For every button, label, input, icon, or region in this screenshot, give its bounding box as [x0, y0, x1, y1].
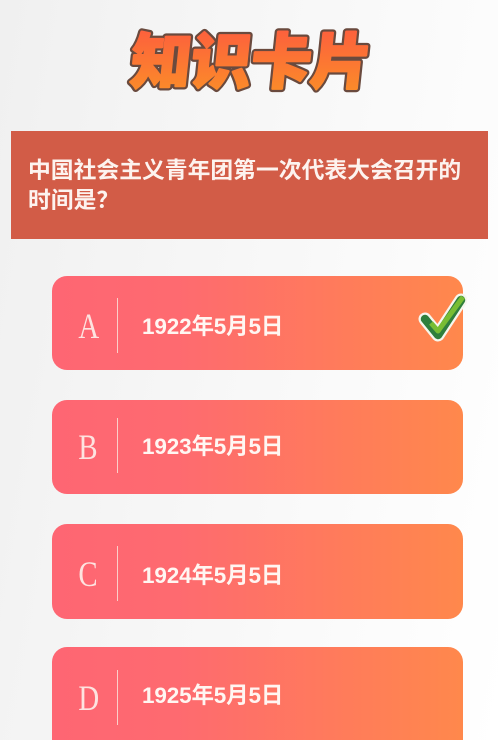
answer B: 1923年5月5日	[142, 434, 283, 459]
question text	[28, 157, 461, 213]
letter C: C	[78, 554, 98, 594]
answer D: 1925年5月5日	[142, 683, 283, 708]
divider D	[117, 670, 118, 725]
question banner	[11, 131, 488, 239]
title: 知识卡片	[128, 29, 375, 96]
icon: green check mark	[418, 294, 467, 342]
option C	[52, 524, 463, 619]
option D	[52, 647, 463, 740]
letter B: B	[78, 427, 98, 467]
answer C: 1924年5月5日	[142, 563, 283, 588]
letter A: A	[78, 306, 99, 346]
divider A	[117, 298, 118, 353]
title: 知识卡片	[128, 29, 375, 96]
question text: 中国社会主义青年团第一次代表大会召开的	[28, 157, 461, 183]
divider B	[117, 418, 118, 473]
option B	[52, 400, 463, 494]
question text: 时间是？	[28, 187, 119, 213]
letter D: D	[78, 678, 99, 718]
option A	[52, 276, 463, 370]
divider C	[117, 546, 118, 601]
answer A: 1922年5月5日	[142, 314, 283, 339]
